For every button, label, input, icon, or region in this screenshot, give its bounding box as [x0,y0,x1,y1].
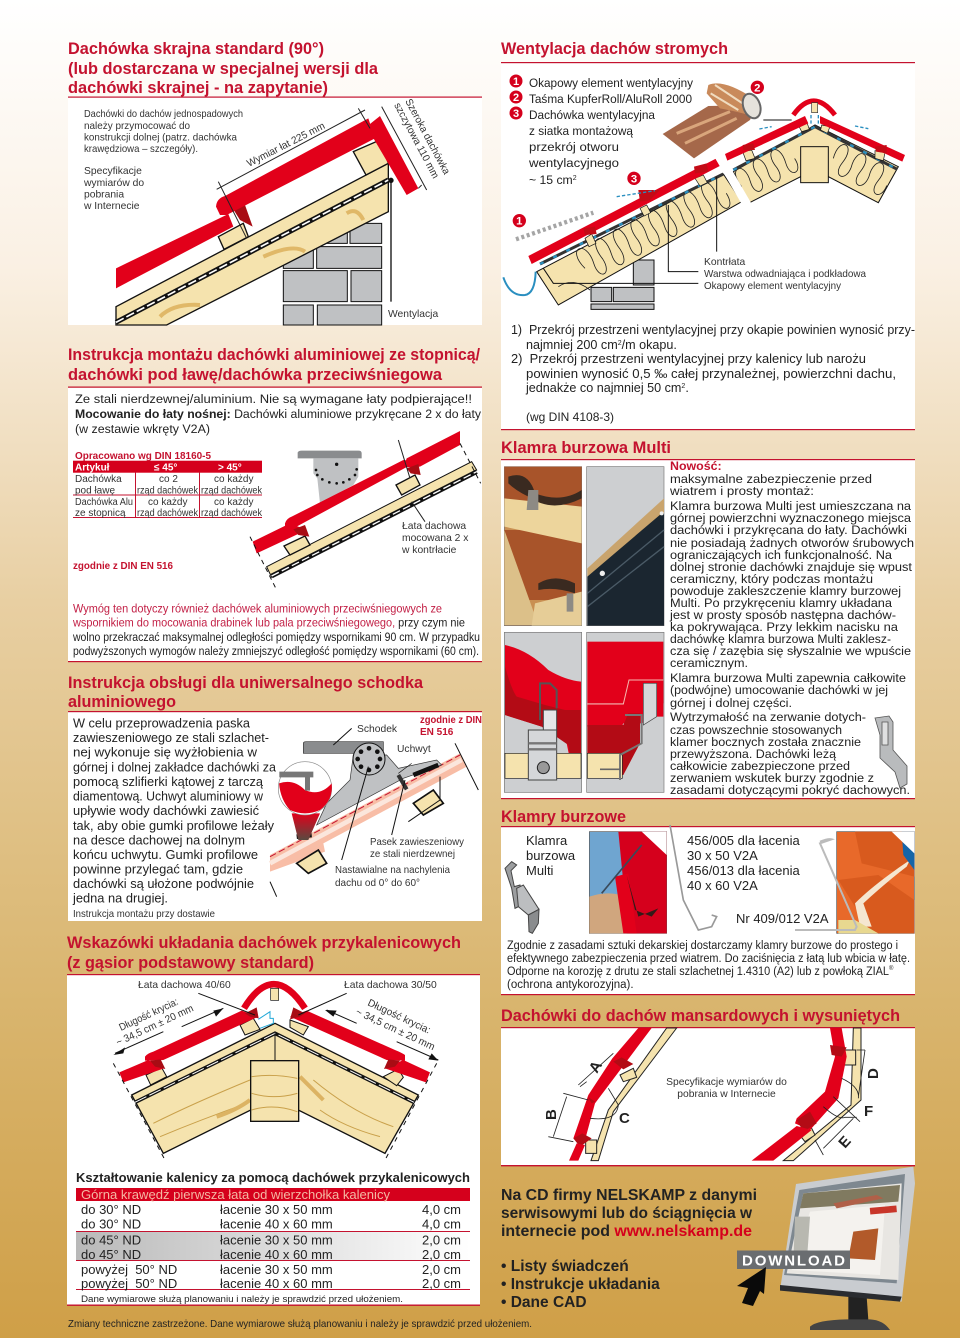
notes: jednakże co najmniej 50 cm [526,381,681,395]
red tile photo [589,832,667,933]
heading: (lub dostarczana w specjalnej wersji dla [68,60,379,78]
mansard drawings [548,1028,865,1161]
table: co 2 [159,474,178,485]
table: ≤ 45° [154,462,177,474]
rafter left [537,174,742,305]
notes: . [685,381,689,395]
red tiles [253,523,307,553]
drawing labels: Warstwa odwadniająca i podkładowa [704,269,866,280]
ridge table [76,1170,470,1305]
heading [67,934,461,972]
text block: końcu uchwytu. Gumki profilowe [73,847,258,862]
text block [72,716,277,906]
description: efektywnego zabezpieczenia przed wiatrem. Do zaciśnięcia z łatą lub wbicia w łatę. [507,953,910,965]
description: ograniczających ich funkcjonalność. Na [670,548,892,562]
text block: pomocą szlifierki kątowej z tarczą [73,774,264,789]
notes: (wg DIN 4108-3) [526,410,614,424]
numbered list: Taśma KupferRoll/AluRoll 2000 [529,92,692,106]
heading: Instrukcja montażu dachówki aluminiowej ze stopnicą/ [68,346,480,364]
table: zgodnie z DIN EN 516 [73,561,173,572]
drawing labels: Kontrłata [704,257,745,268]
leaders [270,728,478,897]
battens [284,475,420,555]
description [507,940,910,991]
insulation [558,142,895,290]
batten label [401,521,469,556]
text block: Dachówki do dachów jednospadowych [84,109,243,120]
ridge table: do 45° ND [81,1232,141,1248]
ridge labels: Długość krycia: [366,998,432,1036]
red note: wolno przekraczać maksymalnej odległości pomiędzy wspornikami 90 cm. W przypadku [72,630,480,644]
download button: DOWNLOAD [742,1252,845,1270]
photo 2 [587,467,664,626]
bullet list: • Listy świadczeń [501,1258,629,1275]
notes: 2) Przekrój przestrzeni wentylacyjnej przy kalenicy lub narożu [511,352,866,366]
text block [75,392,482,436]
ridge table: 4,0 cm [422,1202,461,1217]
spec note: pobrania w Internecie [677,1089,776,1100]
magnifier [292,813,320,840]
leaders [115,993,438,1060]
promo text: Na CD firmy NELSKAMP z danymi [501,1187,757,1204]
ridge cap [793,101,835,115]
ridge table: łacenie 30 x 50 mm [220,1262,333,1277]
numbered list: 2 [513,92,519,104]
gutter [503,272,536,295]
drawing labels: Pasek zawieszeniowy [370,837,465,848]
text block: dachówki są ułożone podwójnie [73,876,254,891]
battens [585,122,885,247]
notes: 2 [618,340,622,347]
panel: Wentylacja dachów stromych [501,40,915,424]
ridge table: łacenie 30 x 50 mm [220,1232,333,1248]
description: ceramiczny, który podczas montażu [670,572,873,586]
text block: jedna na drugiej. [72,890,168,906]
ridge table: Dane wymiarowe służą planowaniu i należy je sprawdzić przed ułożeniem. [81,1294,403,1305]
panel: Dachówki mansardowe [501,1007,900,1161]
table: Artykuł [75,462,110,474]
table: rząd dachówek [137,508,199,519]
holder [303,742,383,753]
description: ceramicznym. [670,656,748,670]
panel: Instrukcja montażu [68,346,482,658]
table: co każdy [214,497,253,508]
ridge table: powyżej 50° ND [81,1276,177,1291]
heading: Dachówki do dachów mansardowych i wysuniętych [501,1007,900,1025]
description: powoduje zakleszczenie klamry burzowej [670,584,901,598]
panel: Wskazówki układania [67,934,470,1305]
description: jest w prosty sposób następna dachów- [669,608,896,622]
description: Zgodnie z zasadami sztuki dekarskiej dostarczamy klamry burzowe do prostego i [507,940,898,952]
promo text [501,1187,757,1240]
bullet list [501,1258,660,1311]
text block: diamentową. Uchwyt aluminiowy w [73,788,264,804]
product text: 456/013 dla łacenia [687,863,801,878]
spec note: Specyfikacje wymiarów do [666,1077,787,1088]
ridge labels [115,980,437,1053]
description: klamer bocznych została znacznie [670,735,861,749]
drawing labels: ze stali nierdzewnej [370,849,455,860]
table: Dachówka Alu [75,497,133,508]
text block: górnej i dolnej zakładce dachówki za [73,760,277,774]
description: czas powszechnie stosowanych [670,723,842,737]
description: dachówki i przykręcana do łaty. Dachówki [670,523,907,537]
beam [251,1061,299,1121]
pale tile band [270,753,467,872]
batten label: Łata dachowa [402,521,466,532]
photo 4 [587,632,664,792]
screw strip [516,213,593,239]
panel: Dachówka skrajna [68,40,452,325]
table [73,451,263,572]
product text: Multi [526,863,554,878]
description: Odporne na korozję z drutu ze stali szlachetnej 1.4310 (A2) lub z powłoką ZIAL [507,966,890,978]
icon: clip [875,716,907,788]
ridge labels: Łata dachowa 30/50 [344,980,437,991]
dimension labels: Wentylacja [388,309,438,320]
break [715,150,752,213]
ventilation roof drawing [503,81,905,309]
heading: Instrukcja obsługi dla uniwersalnego schodka [68,674,424,692]
bullet list: • Dane CAD [501,1294,587,1311]
description [669,459,914,797]
ridge table: 2,0 cm [422,1262,461,1277]
promo text: internecie pod www.nelskamp.de [501,1223,752,1240]
ridge table: 2,0 cm [422,1232,461,1248]
description: nie posiadają żadnych otworów śrubowych [670,536,914,550]
dimension labels: Szeroka dachówka [402,97,452,177]
battens [297,790,443,873]
heading [68,40,379,97]
drawing labels: Nastawialne na nachylenia [335,865,450,876]
table: rząd dachówek [201,508,263,519]
photo 1 [504,467,582,626]
numbered list: ~ 15 cm [529,173,573,187]
product text [526,833,829,926]
table: co każdy [214,474,253,485]
numbered list: 1 [513,76,519,88]
description: dolnej stronie dachówki znajduje się wpust [670,560,913,574]
drawing labels: zgodnie z DIN [420,715,482,726]
text block: wymiarów do [83,178,144,189]
text block [83,109,243,212]
heading [68,674,424,711]
ridge table: łacenie 30 x 50 mm [220,1202,333,1217]
panel: Klamry burzowe [501,808,914,991]
red note: podwyższonych wymogów należy zmniejszyć odległość pomiędzy wspornikami (60 cm). [73,644,479,658]
membrane [135,1033,414,1102]
numbered list: wentylacyjnego [528,156,619,170]
product text: 456/005 dla łacenia [687,833,801,848]
red note: wspornikiem do mocowania drabinek lub pala przeciwśniegowego, przy czym nie [72,616,465,630]
monitor [780,1167,915,1330]
description: przewyższona. Dachówki leżą [670,747,836,761]
heading: (z gąsior podstawowy standard) [67,954,314,972]
panel: Instrukcja obsługi schodka [68,674,482,920]
ventilation roof drawing: 3 [631,173,637,185]
ridge cap [244,984,305,1008]
battens [218,140,388,249]
numbered list: Okapowy element wentylacyjny [529,76,694,90]
product text: Nr 409/012 V2A [736,911,829,926]
bullet list: • Instrukcje układania [501,1276,660,1293]
mansard labels: E [835,1133,855,1152]
ridge labels: ~ 34,5 cm ± 20 mm [354,1007,436,1053]
orange tile photo [795,832,914,933]
spec note [666,1077,787,1100]
heading: Klamry burzowe [501,808,626,826]
numbered list: przekrój otworu [529,140,619,154]
description: wiatrem i prosty montaż: [669,484,814,498]
ridge table: Górna krawędź pierwsza łata od wierzchołka kalenicy [81,1188,391,1202]
description: (podwójne) umocowanie dachówki w jej [670,683,888,697]
description: Klamra burzowa Multi jest umieszczana na [670,499,911,513]
promo text: serwisowymi lub do ściągnięcia w [501,1205,753,1222]
description: Klamra burzowa Multi zapewnia całkowite [670,671,906,685]
wood [132,1023,418,1153]
caption: Instrukcja montażu przy dostawie [73,909,215,920]
heading: Wskazówki układania dachówek przykalenicowych [67,934,461,952]
numbered list: 3 [513,108,519,120]
heading: Klamra burzowa Multi [501,439,671,457]
description: górnej powierzchni wyznaczonego miejsca [670,511,911,525]
batten label: w kontrłacie [401,545,457,556]
table: Dachówka [75,474,122,485]
text block: Specyfikacje [84,166,142,177]
beam [801,147,828,183]
text block: zawieszeniowego ze stali szlachet- [73,730,269,745]
ridge drawing [113,984,438,1160]
description: zerwaniem wskutek burzy zgodnie z [670,771,874,785]
description: ® [889,965,894,972]
dimension labels: szczytowa 110 mm [391,101,440,181]
ridge table: 4,0 cm [422,1216,461,1232]
text block: tak, aby obie gumki profilowe leżały [73,818,274,833]
mansard labels: B [543,1109,560,1120]
text block: Ze stali nierdzewnej/aluminium. Nie są wymagane łaty podpierające!! [75,392,472,406]
notes: /m okapu. [622,338,677,352]
ridge table: do 30° ND [81,1216,141,1232]
membrane [540,127,897,264]
seal details [297,765,438,837]
ridge table: 2,0 cm [422,1276,461,1291]
description: Wytrzymałość na zerwanie dotych- [670,710,866,724]
description: ka pokrywająca. Przy lekkim nacisku na [670,620,898,634]
description: cza się / zazębia się słyszalnie we wpuście [670,644,911,658]
table: Opracowano wg DIN 18160-5 [75,451,211,462]
ridge labels: ~ 34,5 cm ± 20 mm [115,1003,195,1049]
rafter right [733,125,898,203]
text block: nej wykonuje się wyżłobienia w [73,744,258,760]
table: ze stopnicą [75,508,126,519]
panel: CD promo [501,1167,915,1330]
photo 3 [504,632,582,792]
mansard labels: D [865,1068,882,1079]
description: (ochrona antykorozyjna). [507,979,634,991]
drawing labels: Schodek [357,724,398,735]
footer note: Zmiany techniczne zastrzeżone. Dane wymiarowe służą planowaniu i należy je sprawdzić przed ułożeniem. [68,1319,532,1330]
text block: należy przymocować do [84,121,190,132]
text block: w Internecie [83,201,140,212]
ridge table: powyżej 50° ND [81,1262,177,1277]
description: maksymalne zabezpieczenie przed [670,472,872,486]
red note: Wymóg ten dotyczy również dachówek aluminiowych przeciwśniegowych ze [73,602,442,616]
heading: dachówki pod ławę/dachówka przeciwśniegowa [68,366,443,384]
red tiles [119,1060,164,1082]
heading: dachówki skrajnej - na zapytanie) [68,79,328,97]
product text: 30 x 50 V2A [687,848,758,863]
mansard right [752,1028,865,1161]
dimension labels: Wymiar łat 225 mm [245,121,327,170]
dimension labels [245,97,452,320]
leaders [543,120,792,283]
ridge labels: Łata dachowa 40/60 [138,980,231,991]
description: Nowość: [670,459,722,473]
mansard labels: F [864,1103,873,1120]
text block: W celu przeprowadzenia paska [73,716,251,730]
table: > 45° [218,462,242,474]
text block: powinne przylegać tam, gdzie [73,862,243,876]
text block: (w zestawie wkręty V2A) [75,422,210,436]
table: co każdy [148,497,187,508]
text block: upływie wody dachówki zawiesić [73,803,259,818]
ridge table: Kształtowanie kalenicy za pomocą dachówek przykalenicowych [76,1170,470,1185]
product images [505,825,914,933]
numbered list: Dachówka wentylacyjna [529,108,655,122]
notes: powinien wynosić 0,5 ‰ całej przynależnej, powierzchni dachu, [526,367,896,381]
drawing labels: Uchwyt [397,744,431,755]
arrow cursor [737,1267,766,1306]
snow holder [298,451,362,503]
text block: na desce dachowej na dolnym [73,832,245,848]
text block: Mocowanie do łaty nośnej: Dachówki aluminiowe przykręcane 2 x do łaty [75,407,482,421]
description: całkowicie zabezpieczone przed [670,759,850,773]
bricks [591,260,654,309]
description: Multi. Po przykręceniu klamry układana [670,596,892,610]
notes: najmniej 200 cm [526,338,618,352]
table: rząd dachówek [201,486,263,496]
notes: 2 [681,383,685,390]
icon: multi clip [505,862,539,933]
deck [267,462,477,577]
mansard labels: A [586,1058,606,1076]
ventilation roof drawing: 1 [516,216,522,228]
ventilation roof drawing: 2 [754,82,760,94]
ridge table: łacenie 40 x 60 mm [220,1216,333,1232]
battens [146,1018,403,1086]
heading: aluminiowego [68,693,176,711]
bricks [283,223,382,325]
ridge table: łacenie 40 x 60 mm [220,1276,333,1291]
ridge labels: Długość krycia: [118,997,180,1034]
roll photo [663,105,757,158]
tile fixing drawing [250,431,481,590]
notes [511,323,915,424]
ridge table: 2,0 cm [422,1247,461,1262]
drawing labels: dachu od 0° do 60° [335,878,420,889]
roof section drawing [116,107,427,325]
mansard labels: C [619,1110,630,1127]
text block: konstrukcji dolnej (patrz. dachówka [84,132,237,144]
numbered list [510,74,694,187]
numbered list: 2 [573,175,577,182]
notes: 1) Przekrój przestrzeni wentylacyjnej przy okapie powinien wynosić przy- [511,323,915,337]
drawing labels: EN 516 [420,727,454,738]
numbered list: z siatka montażową [529,124,633,138]
heading: Dachówka skrajna standard (90°) [68,40,324,58]
red tiles [528,157,722,264]
drawing labels [335,715,482,889]
vent arrows [617,115,868,197]
step holder drawing [270,728,478,897]
description: dachówkę klamra burzowa Multi zaklesz- [670,632,891,646]
description: górnej i dolnej części. [670,696,792,710]
wire hook [670,825,717,930]
mansard left [548,1028,677,1161]
photos [504,467,664,792]
red note [72,602,480,658]
product text: Klamra [526,833,568,848]
heading [68,346,480,384]
table: pod ławę [75,486,115,496]
ridge table: do 30° ND [81,1202,141,1217]
membrane [116,180,388,322]
text block: pobrania [84,190,124,200]
wood deck [116,163,388,325]
number badges [513,81,764,227]
product text: burzowa [526,848,576,863]
heading: Wentylacja dachów stromych [501,40,728,58]
red tiles [116,214,233,288]
drawing labels: Okapowy element wentylacyjny [704,281,842,292]
drawing labels [704,257,866,292]
ridge table: do 45° ND [81,1247,141,1262]
mansard labels [543,1058,882,1152]
batten label: mocowana 2 x [402,533,469,544]
text block: krawędziowa – szczegóły). [84,144,198,155]
dimension lines [217,107,427,238]
table: rząd dachówek [137,486,199,496]
product text: 40 x 60 V2A [687,878,758,893]
description: zasadami dotyczącymi pokryć dachowych. [670,783,910,797]
ridge table: łacenie 40 x 60 mm [220,1247,333,1262]
panel: Klamra burzowa Multi [501,439,914,797]
